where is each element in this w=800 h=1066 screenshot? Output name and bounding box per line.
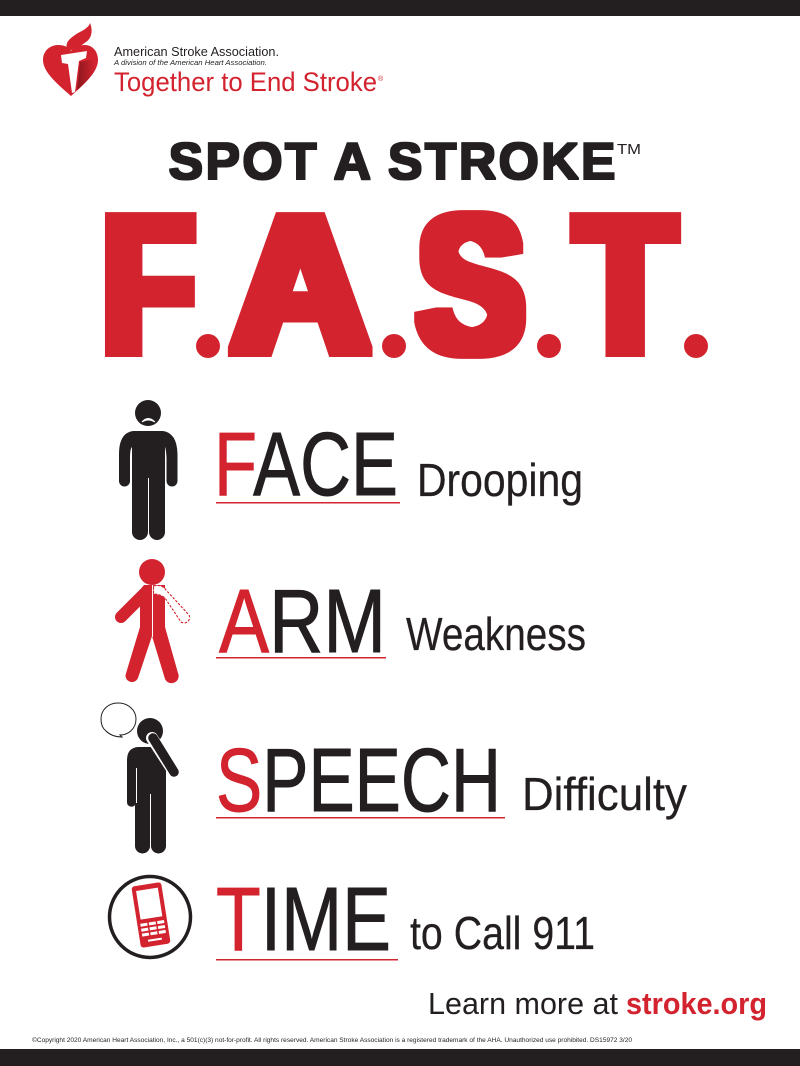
call to action: Learn more at (428, 986, 618, 1021)
call to action (428, 986, 767, 1021)
logo text: division line: A division of the American Heart Association. (113, 60, 267, 67)
icon: person with drooping face (119, 400, 178, 540)
logo text: American Stroke Association: American Stroke Association. (114, 44, 279, 59)
title: spot a stroke: TM (617, 141, 641, 158)
row: face drooping (119, 400, 583, 540)
heading: TIME: TIME (216, 870, 391, 970)
logo text: tagline: Together to End Stroke (114, 67, 377, 97)
label: Drooping: Drooping (417, 454, 583, 506)
top bar (0, 0, 800, 16)
icon: person with speech bubble (101, 703, 174, 854)
title: F.A.S.T. (103, 175, 708, 394)
call to action: stroke.org (626, 986, 767, 1021)
heading: SPEECH: SPEECH (216, 731, 501, 831)
row: speech difficulty (101, 703, 687, 854)
heading: FACE: FACE (214, 415, 398, 515)
logo text: registered mark: ® (378, 75, 384, 83)
label: to Call 911: to Call 911 (410, 907, 595, 959)
underline (216, 502, 400, 504)
label: Weakness: Weakness (406, 608, 586, 660)
icon: person with weak arm (121, 559, 190, 683)
icon: heart and torch (43, 23, 98, 96)
underline (216, 959, 398, 960)
copyright: ©Copyright 2020 American Heart Association, Inc., a 501(c)(3) not-for-profit. All rights reserved. American Stroke Association is a registered trademark of the AHA. Unauthorized use prohibited. DS15972 3/20 (32, 1036, 632, 1044)
row: arm weakness (121, 559, 586, 683)
underline (216, 817, 505, 818)
title: F.A.S.T.: T (576, 175, 675, 394)
row: time to call 911 (110, 870, 595, 970)
underline (216, 657, 386, 658)
heading: ARM: ARM (219, 572, 386, 672)
title: F.A.S.T.: S (418, 175, 524, 394)
logo (43, 23, 384, 97)
title: F.A.S.T.: F (103, 175, 194, 394)
bottom bar (0, 1049, 800, 1066)
icon: phone in circle (110, 876, 190, 958)
title: spot a stroke: SPOT A STROKE (168, 133, 616, 191)
speech bubble (101, 703, 136, 737)
title: F.A.S.T.: A (231, 175, 370, 394)
label: Difficulty: Difficulty (522, 768, 687, 820)
